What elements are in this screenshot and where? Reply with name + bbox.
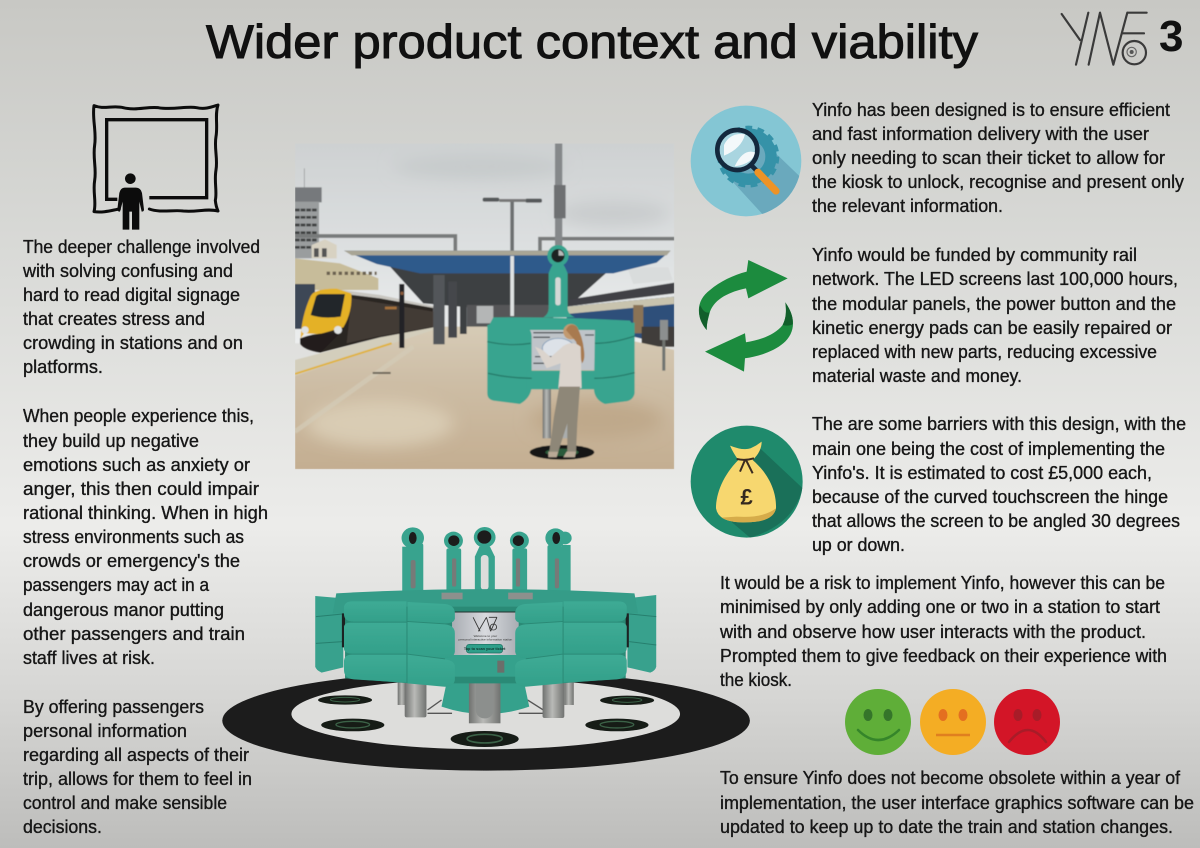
- text block: funding and repair: the modular panels, the power button and the: [812, 294, 1176, 314]
- icon: magnifying glass and gear: [691, 106, 801, 216]
- text block: left column: emotions such as anxiety or: [23, 455, 250, 475]
- back side wings: [315, 595, 656, 673]
- hub top and body: [333, 589, 638, 683]
- text block: efficient information delivery: the relevant information.: [812, 196, 1003, 216]
- text block: implementation risk: with and observe how user interacts with the product.: [719, 622, 1146, 642]
- tower building: [295, 168, 322, 258]
- text block: left column: staff lives at risk.: [23, 648, 155, 668]
- text block: cost barriers: Yinfo's. It is estimated to cost £5,000 each,: [812, 463, 1152, 483]
- text block: left column: dangerous manor putting: [23, 600, 224, 620]
- text block: left column: passengers may act in a: [23, 575, 210, 595]
- text block: left column: personal information: [23, 721, 187, 741]
- icon: sad face: [994, 689, 1060, 755]
- 3D render: kiosk cluster on floor ring: [222, 527, 750, 771]
- icon: money bag with pound sign: [691, 426, 803, 538]
- sign post right: [660, 320, 668, 371]
- floor ring: [222, 671, 750, 771]
- text block: funding and repair: kinetic energy pads can be easily repaired or: [812, 318, 1172, 338]
- woman using kiosk: [535, 324, 584, 457]
- text block: funding and repair: [812, 245, 1178, 386]
- text block: cost barriers: because of the curved touchscreen the hinge: [812, 487, 1168, 507]
- icon: happy face: [845, 689, 911, 755]
- mast eyes: [409, 530, 560, 546]
- text block: left column: decisions.: [23, 817, 102, 837]
- text block: cost barriers: main one being the cost of implementing the: [812, 439, 1165, 459]
- title: Wider product context and viability: [206, 15, 979, 68]
- support posts and base: [398, 673, 574, 723]
- text block: efficient information delivery: only needing to scan their ticket to allow for: [812, 148, 1165, 168]
- text block: avoiding obsolescence: implementation, the user interface graphics software can be: [720, 793, 1194, 813]
- logo: Yinfo with page number: [1062, 12, 1183, 65]
- icon: person looking at framed picture: [93, 105, 218, 230]
- kiosk screen: [527, 327, 595, 370]
- power button: [497, 661, 504, 673]
- platform pillars: [433, 275, 467, 344]
- photo: kiosk on a railway platform: [295, 143, 674, 469]
- text block: left column: they build up negative: [23, 431, 199, 451]
- centre screen: Welcome to your: [474, 634, 497, 638]
- lamp post: [483, 198, 542, 256]
- text block: implementation risk: the kiosk.: [720, 670, 792, 690]
- centre screen: [452, 612, 519, 655]
- text block: left column: with solving confusing and: [22, 261, 233, 281]
- text block: cost barriers: up or down.: [812, 535, 905, 555]
- page number: 3: [1159, 12, 1183, 61]
- text block: funding and repair: replaced with new parts, reducing excessive: [812, 342, 1157, 362]
- text block: avoiding obsolescence: updated to keep up to date the train and station changes.: [720, 817, 1173, 837]
- text block: left column: trip, allows for them to feel in: [23, 769, 252, 789]
- text block: efficient information delivery: and fast information delivery with the user: [812, 124, 1149, 144]
- floor pad: [530, 445, 594, 460]
- kiosk panels: [487, 317, 635, 404]
- centre screen: personal interactive information station: [458, 638, 513, 642]
- ground: [295, 327, 674, 469]
- text block: implementation risk: Prompted them to give feedback on their experience with: [720, 646, 1167, 666]
- text block: funding and repair: Yinfo would be funded by community rail: [812, 245, 1137, 265]
- text block: avoiding obsolescence: To ensure Yinfo does not become obsolete within a year of: [720, 768, 1181, 788]
- side slits: [342, 608, 629, 647]
- right hand train and roof: [567, 267, 674, 347]
- tall mast: [554, 143, 566, 250]
- text block: left column: other passengers and train: [23, 624, 245, 644]
- text block: left column: rational thinking. When in high: [23, 503, 268, 523]
- text block: funding and repair: material waste and money.: [812, 366, 1022, 386]
- sky: [295, 184, 674, 344]
- panel seams: [487, 336, 635, 378]
- text block: left column: The deeper challenge involved: [23, 237, 260, 257]
- text block: efficient information delivery: the kiosk to unlock, recognise and present only: [812, 172, 1184, 192]
- station building: [295, 239, 378, 329]
- platform end wall: [467, 256, 553, 328]
- text block: left column: regarding all aspects of their: [23, 745, 249, 765]
- text block: left column: platforms.: [23, 357, 103, 377]
- signal post: [399, 284, 404, 348]
- text block: efficient information delivery: Yinfo has been designed is to ensure efficient: [812, 100, 1170, 120]
- text block: left column: that creates stress and: [23, 309, 205, 329]
- text block: avoiding obsolescence: [720, 768, 1194, 837]
- centre screen: Tap to scan your ticket: [464, 647, 506, 651]
- left modular panels: [344, 601, 455, 687]
- text block: left column: crowds or emergency's the: [23, 551, 240, 571]
- text block: left column: crowding in stations and on: [23, 333, 243, 353]
- text block: left column: When people experience this,: [23, 406, 254, 426]
- text block: efficient information delivery: [812, 100, 1184, 216]
- text block: left column: control and make sensible: [23, 793, 227, 813]
- text block: implementation risk: It would be a risk to implement Yinfo, however this can be: [720, 573, 1165, 593]
- text block: implementation risk: minimised by only adding one or two in a station to start: [720, 597, 1160, 617]
- text block: cost barriers: [812, 414, 1186, 555]
- text block: left column: [22, 237, 268, 837]
- text block: implementation risk: [719, 573, 1167, 690]
- text block: funding and repair: network. The LED screens last 100,000 hours,: [812, 269, 1178, 289]
- right modular panels: [515, 601, 627, 687]
- text block: left column: anger, this then could impair: [23, 479, 259, 499]
- text block: cost barriers: The are some barriers with this design, with the: [812, 414, 1186, 434]
- kiosk mast and eye: [543, 245, 575, 317]
- overhead gantries: [295, 236, 674, 251]
- kiosk post: [543, 383, 568, 438]
- text block: left column: hard to read digital signage: [23, 285, 240, 305]
- icon: green recycle arrows: [699, 260, 793, 372]
- text block: left column: stress environments such as: [23, 527, 244, 547]
- icon: neutral face: [920, 689, 986, 755]
- text block: cost barriers: that allows the screen to be angled 30 degrees: [812, 511, 1180, 531]
- icon: money bag with pound sign: £: [741, 484, 753, 509]
- left hand train: [295, 289, 433, 376]
- canopy: [344, 251, 671, 308]
- floor pads: [318, 695, 654, 747]
- mast slots: [411, 555, 559, 590]
- text block: left column: By offering passengers: [23, 697, 204, 717]
- upper eye masts: [402, 527, 572, 597]
